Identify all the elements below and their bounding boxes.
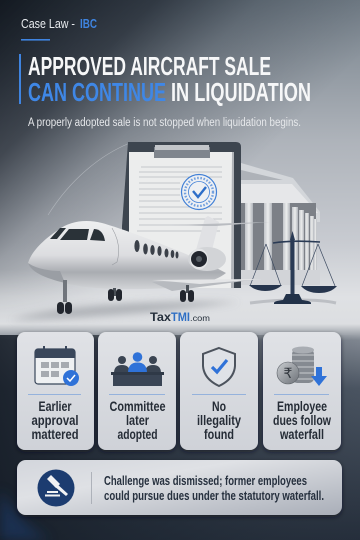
label: earlier approval mattered: Earlier — [38, 399, 72, 414]
panel: no illegality — [180, 332, 258, 450]
label: committee later adopted: later — [126, 413, 150, 428]
label: employee dues follow waterfall: Employee — [277, 399, 327, 414]
label: no illegality found: illegality — [197, 413, 241, 428]
aircraft — [28, 216, 270, 314]
eyebrow: case law tag: Case Law - — [21, 17, 75, 31]
label: earlier approval mattered: mattered — [32, 427, 78, 442]
eyebrow: case law tag: IBC — [80, 17, 97, 31]
engine — [188, 247, 226, 271]
conclusion text — [104, 473, 324, 503]
ground shadow — [10, 302, 240, 320]
panel: conclusion banner — [17, 460, 342, 515]
subtitle: A properly adopted sale is not stopped when liquidation begins. — [28, 117, 301, 129]
courthouse — [236, 163, 320, 285]
label: committee later adopted: adopted — [118, 427, 158, 442]
label: no illegality found: found — [204, 427, 234, 442]
TaxTMI logo — [150, 312, 210, 324]
title: CAN CONTINUE — [28, 77, 166, 107]
panel: employee dues — [263, 332, 341, 450]
icon: committee at table — [111, 352, 164, 386]
eyebrow: case law tag — [21, 17, 97, 41]
hero illustration — [10, 142, 337, 320]
panel: earlier approval — [17, 332, 94, 450]
icon: shield with check — [203, 348, 235, 386]
label: employee dues follow waterfall — [273, 399, 331, 442]
panel: committee adopted — [98, 332, 176, 450]
title — [19, 51, 311, 107]
icon: calendar with check — [35, 346, 79, 386]
TaxTMI logo: TMI — [171, 312, 190, 324]
label: employee dues follow waterfall: waterfall — [279, 427, 324, 442]
arc decoration — [48, 143, 130, 215]
label: committee later adopted: Committee — [110, 399, 166, 414]
label: earlier approval mattered — [32, 399, 78, 442]
TaxTMI logo: Tax — [150, 312, 172, 324]
label: no illegality found — [197, 399, 241, 442]
label: earlier approval mattered: approval — [32, 413, 78, 428]
icon: coin stack with rupee and arrow: ₹ — [284, 365, 293, 381]
label: no illegality found: No — [212, 399, 226, 414]
approval stamp — [182, 174, 216, 210]
TaxTMI logo: .com — [190, 313, 210, 323]
clipboard — [122, 142, 241, 288]
landing gear — [57, 280, 194, 314]
cockpit windows — [50, 228, 105, 241]
cabin windows — [134, 240, 178, 258]
label: committee later adopted — [110, 399, 166, 442]
scales of justice — [249, 231, 337, 304]
label: employee dues follow waterfall: dues follow — [273, 413, 331, 428]
icon: gavel — [38, 470, 74, 506]
